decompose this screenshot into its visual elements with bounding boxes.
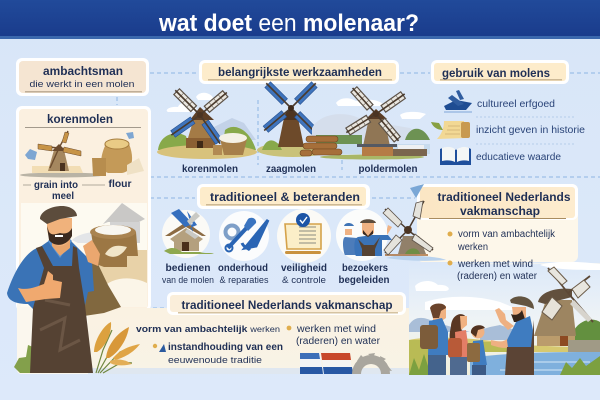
heading: traditioneel Nederlands (438, 190, 571, 204)
arm and thumb (18, 271, 62, 302)
bullet (287, 326, 291, 330)
icon: flags (300, 353, 353, 374)
illustration: miller (7, 206, 121, 373)
title: wat doet een molenaar? (158, 10, 419, 37)
label: bedienen van de molen: bedienen (166, 262, 210, 274)
text: cultureel erfgoed: cultureel erfgoed (477, 99, 555, 110)
hand on sack (83, 240, 100, 266)
text: werken: werken (457, 242, 488, 253)
logs (300, 136, 342, 156)
icon: tools (219, 211, 269, 261)
text: raderen en water: (raderen) en water (457, 271, 538, 282)
illustration: poldermolen (300, 85, 430, 160)
text: vorm van ambachtelijk werken: vorm van ambachtelijk werken (136, 324, 280, 335)
text: instandhouding: instandhouding van een (168, 342, 283, 353)
icon: sacks of flour (92, 132, 144, 176)
label: zaagmolen: zaagmolen (266, 164, 316, 175)
text: werken met wind: werken met wind (296, 324, 376, 335)
icon: gear (352, 353, 392, 374)
label: poldermolen: poldermolen (358, 164, 418, 175)
grass (409, 354, 600, 375)
text: raderen en water: (raderen) en water (296, 336, 381, 347)
label: bezoekers begeleiden: begeleiden (338, 274, 390, 286)
water (470, 352, 600, 375)
visitor mother (448, 314, 470, 375)
panel: traditioneel Nederlands vakmanschap (bottom) (88, 292, 409, 374)
section heading: traditioneel & beteranden: traditioneel & beteranden (210, 190, 360, 204)
illustration backdrop (21, 203, 147, 307)
text: eeuwenoude traditie: eeuwenoude traditie (168, 355, 262, 366)
text: educatieve waarde: educatieve waarde (476, 152, 561, 163)
section heading: gebruik van molens (431, 60, 569, 84)
icon: flour sack (90, 225, 138, 267)
caption: flour: flour (108, 179, 132, 190)
cap (40, 206, 77, 224)
text: inzicht geven in historie: inzicht geven in historie (476, 125, 585, 136)
miller guide (491, 296, 534, 375)
shirt (7, 240, 94, 310)
label: bedienen van de molen (162, 262, 214, 285)
label: veiligheid & controle: & controle (282, 275, 326, 286)
header band (0, 0, 600, 39)
heading: korenmolen: korenmolen (47, 112, 113, 126)
section heading: traditioneel & beteranden (197, 184, 370, 209)
icon: guide and visitor (336, 209, 392, 261)
panel: ambachtsman: die werkt in een molen (30, 79, 134, 90)
bullet (448, 260, 452, 266)
panel: ambachtsman (16, 58, 149, 96)
section heading: gebruik van molens: gebruik van molens (442, 66, 550, 80)
label: veiligheid & controle (281, 262, 327, 286)
text: vorm van ambachtelijk: vorm van ambachtelijk (458, 229, 556, 240)
apron (30, 246, 93, 373)
heading (438, 190, 571, 218)
caption: grain into meel: grain into (34, 180, 78, 191)
illustration: korenmolen (157, 87, 257, 159)
icon: small bullet mark (153, 344, 166, 352)
caption: grain into meel (34, 180, 78, 202)
label: korenmolen: korenmolen (182, 164, 238, 175)
label: bezoekers begeleiden: bezoekers (342, 262, 388, 274)
icon: plane tool (444, 90, 472, 112)
icon: checklist scroll (277, 209, 331, 263)
label: bezoekers begeleiden (338, 262, 390, 286)
label: bedienen van de molen: van de molen (162, 275, 214, 285)
panel: traditioneel Nederlands vakmanschap (right) (417, 184, 578, 262)
illustration: windmill beside panel (383, 184, 446, 261)
visitor child (467, 325, 487, 375)
fields (409, 338, 600, 352)
section heading: belangrijkste werkzaamheden: belangrijkste werkzaamheden (218, 65, 382, 79)
neck and head (52, 232, 70, 256)
bullet (448, 232, 452, 236)
icon: bedienen windmill (162, 209, 214, 258)
heading: vakmanschap (460, 204, 540, 218)
heading bar: traditioneel Nederlands vakmanschap (182, 300, 392, 312)
illustration: scene with miller and family (409, 262, 600, 375)
label: veiligheid & controle: veiligheid (281, 262, 327, 274)
windmill (534, 267, 600, 352)
visitor father (420, 304, 448, 375)
panel: ambachtsman: ambachtsman (43, 66, 123, 78)
caption: grain into meel: meel (52, 191, 74, 202)
hills (409, 318, 515, 340)
bag in hand (80, 258, 121, 316)
bush (14, 345, 36, 373)
icon: scroll (431, 121, 470, 139)
icon: book (440, 147, 471, 165)
label: onderhoud & reparaties: & reparaties (220, 275, 269, 285)
section heading: belangrijkste werkzaamheden (199, 60, 399, 84)
label: onderhoud & reparaties (218, 262, 269, 285)
heading bar (167, 292, 406, 315)
text: werken met wind: werken met wind (457, 258, 533, 270)
icon: wheat (94, 322, 140, 373)
illustration: zaagmolen (257, 80, 329, 157)
panel: korenmolen (16, 106, 151, 374)
icon: small windmill (20, 131, 104, 178)
label: onderhoud & reparaties: onderhoud (218, 262, 268, 274)
